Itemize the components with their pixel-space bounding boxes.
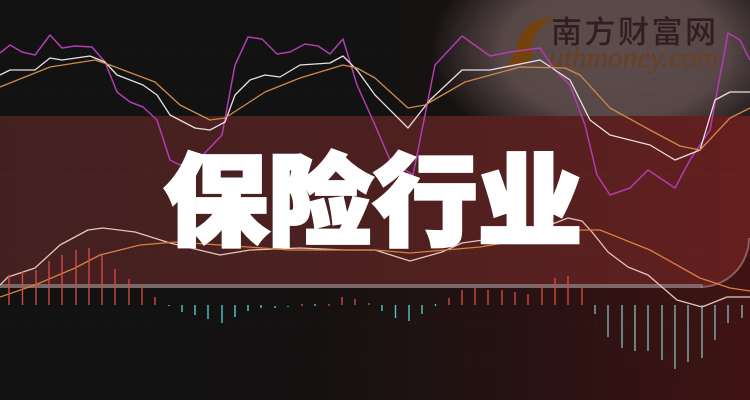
logo chinese name: 南方财富网: [551, 7, 716, 52]
upper chart: magenta line: [0, 33, 750, 195]
upper chart: white line: [0, 56, 750, 160]
highlight strip under the band: [0, 238, 749, 288]
lower chart: white line: [0, 218, 750, 307]
logo crescent: [505, 17, 556, 66]
upper chart: orange line: [0, 60, 750, 150]
histogram: red bars: [9, 248, 582, 306]
title: 保险行业: [164, 147, 582, 258]
histogram: grey-teal bars: [595, 305, 742, 369]
histogram: teal bars: [169, 304, 436, 323]
watermark logo: southmoney: [505, 7, 718, 74]
lower chart: orange line: [0, 230, 750, 297]
logo url: uthmoney.com: [549, 41, 718, 74]
red translucent band: [0, 116, 750, 288]
